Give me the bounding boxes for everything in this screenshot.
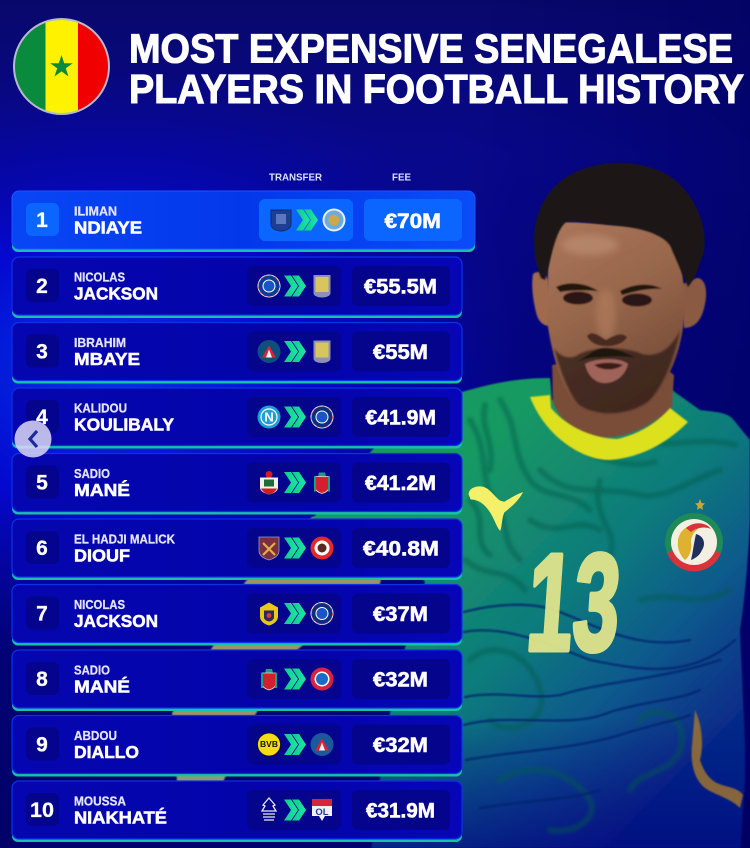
transfer clubs <box>247 724 341 764</box>
player neck <box>552 350 674 437</box>
fee: €70M <box>384 210 441 233</box>
rank 1: 1 <box>36 209 48 232</box>
arrow <box>284 538 306 558</box>
title <box>129 26 744 112</box>
rank 8 <box>26 662 59 695</box>
crest: Liverpool <box>314 472 330 494</box>
arrow <box>284 603 306 624</box>
crest: PSG <box>258 340 280 363</box>
name <box>74 532 175 566</box>
rank 3 <box>26 334 59 368</box>
fee <box>352 528 450 568</box>
rank 3: 3 <box>36 340 48 364</box>
fee <box>352 397 450 437</box>
name: JACKSON <box>74 284 158 304</box>
player hair <box>534 163 705 287</box>
crest: Lyon: OL <box>315 807 329 818</box>
fee: €32M <box>373 734 428 757</box>
name <box>74 402 174 434</box>
name <box>74 204 142 238</box>
name <box>74 729 139 762</box>
fee: €55M <box>373 341 428 364</box>
row 7: Nicolas Jackson <box>12 584 462 646</box>
row 1: Iliman Ndiaye <box>12 191 475 252</box>
name: NICOLAS <box>74 598 125 612</box>
fee: €31.9M <box>366 800 435 822</box>
fee <box>352 332 450 372</box>
fee <box>352 462 450 502</box>
fee: €37M <box>373 603 428 626</box>
rank 9: 9 <box>36 734 48 756</box>
rank 4: 4 <box>36 406 48 429</box>
rank 4 <box>26 400 59 433</box>
crest: Liverpool <box>261 669 277 690</box>
transfer clubs <box>247 528 341 568</box>
name: MBAYE <box>74 349 140 369</box>
crest: West Ham <box>259 537 279 560</box>
crest: PSG <box>310 733 334 756</box>
name: EL HADJI MALICK <box>74 532 175 546</box>
name <box>74 467 130 500</box>
row 6: El Hadji Malick Diouf <box>12 519 462 580</box>
shirt number 13: 13 <box>522 526 625 680</box>
row 3: Ibrahim Mbaye <box>12 322 462 384</box>
arrow <box>284 800 306 820</box>
fee: €32M <box>373 668 428 692</box>
crest: Villarreal <box>260 602 278 626</box>
name: MANÉ <box>74 676 130 696</box>
rank 10 <box>26 793 59 826</box>
crest: Aston Villa <box>314 340 330 363</box>
row 2: Nicolas Jackson <box>12 257 462 318</box>
rank 2: 2 <box>36 275 48 298</box>
rank 10: 10 <box>30 799 54 822</box>
name: SADIO <box>74 467 110 481</box>
transfer clubs <box>247 790 341 830</box>
arrow <box>284 406 306 428</box>
name: MANÉ <box>74 479 130 500</box>
crest: Chelsea <box>310 602 334 625</box>
arrow <box>284 276 306 296</box>
fee <box>364 199 462 241</box>
name <box>74 270 158 304</box>
arrow <box>296 210 318 230</box>
transfer clubs <box>247 397 341 437</box>
flag icon: Senegal <box>13 18 111 116</box>
crest: Chelsea <box>258 274 280 298</box>
jersey side panel <box>692 710 743 808</box>
crest: Borussia Dortmund: BVB <box>260 739 278 749</box>
name: KOULIBALY <box>74 414 174 434</box>
crest: Chelsea <box>310 406 334 428</box>
name: JACKSON <box>74 611 158 631</box>
jersey collar <box>530 395 688 460</box>
carousel back button <box>14 420 52 458</box>
fee: €40.8M <box>363 538 439 560</box>
name <box>74 794 167 828</box>
transfer clubs <box>247 266 341 306</box>
name: NICOLAS <box>74 270 125 284</box>
transfer clubs <box>247 594 341 634</box>
name: IBRAHIM <box>74 336 126 350</box>
name <box>74 664 130 696</box>
name: MOUSSA <box>74 794 126 808</box>
player face <box>547 222 684 413</box>
rank 9 <box>26 728 59 760</box>
name: DIOUF <box>74 546 130 566</box>
row 10: Moussa Niakhate <box>12 781 462 842</box>
arrow <box>284 472 306 493</box>
player photo <box>172 163 750 848</box>
column heading: transfer: TRANSFER <box>269 172 323 184</box>
transfer clubs <box>247 462 341 502</box>
row 4: Kalidou Koulibaly <box>12 388 462 448</box>
player ears <box>532 272 706 328</box>
crest: Everton <box>271 210 291 231</box>
rank 5: 5 <box>36 472 48 494</box>
arrow <box>284 668 306 690</box>
crest: Napoli: N <box>264 410 274 424</box>
fee: €41.2M <box>365 472 436 495</box>
name: NDIAYE <box>74 218 142 238</box>
transfer clubs <box>259 199 353 241</box>
rank 6: 6 <box>36 537 48 560</box>
puma logo <box>469 487 522 530</box>
crest: Aston Villa <box>314 275 330 298</box>
player arm behind table <box>172 517 395 782</box>
rank 5 <box>26 466 59 498</box>
name <box>74 598 158 631</box>
fee <box>352 724 450 764</box>
crest star <box>695 499 705 510</box>
arrow <box>284 341 306 362</box>
crest: Brentford <box>310 536 334 560</box>
crest: Southampton <box>260 471 278 494</box>
rank 6 <box>26 531 59 564</box>
rank 8: 8 <box>36 668 48 691</box>
fee <box>352 659 450 699</box>
transfer clubs <box>247 332 341 372</box>
name <box>74 336 140 369</box>
crest: Bayern Munich <box>310 668 334 690</box>
rank 2 <box>26 269 59 302</box>
arrow <box>284 734 306 755</box>
name: SADIO <box>74 664 110 678</box>
player jersey <box>312 378 750 848</box>
federation crest <box>665 513 723 571</box>
name: ILIMAN <box>74 204 117 218</box>
fee: €55.5M <box>364 276 437 298</box>
transfer clubs <box>247 659 341 699</box>
fee: €41.9M <box>366 406 436 430</box>
rank 7 <box>26 596 59 630</box>
rank 7: 7 <box>36 602 48 626</box>
fee <box>352 790 450 830</box>
crest: Nottingham Forest <box>262 798 276 820</box>
name: DIALLO <box>74 742 139 762</box>
rank 1 <box>26 203 59 236</box>
column heading: fee: FEE <box>392 172 411 184</box>
name: KALIDOU <box>74 402 127 416</box>
fee <box>352 594 450 634</box>
fee <box>352 266 450 306</box>
row 8: Sadio Mane <box>12 650 462 711</box>
name: ABDOU <box>74 729 117 743</box>
name: NIAKHATÉ <box>74 806 167 828</box>
row 9: Abdou Diallo <box>12 716 462 776</box>
crest: Manchester City <box>322 208 346 232</box>
row 5: Sadio Mane <box>12 454 462 514</box>
